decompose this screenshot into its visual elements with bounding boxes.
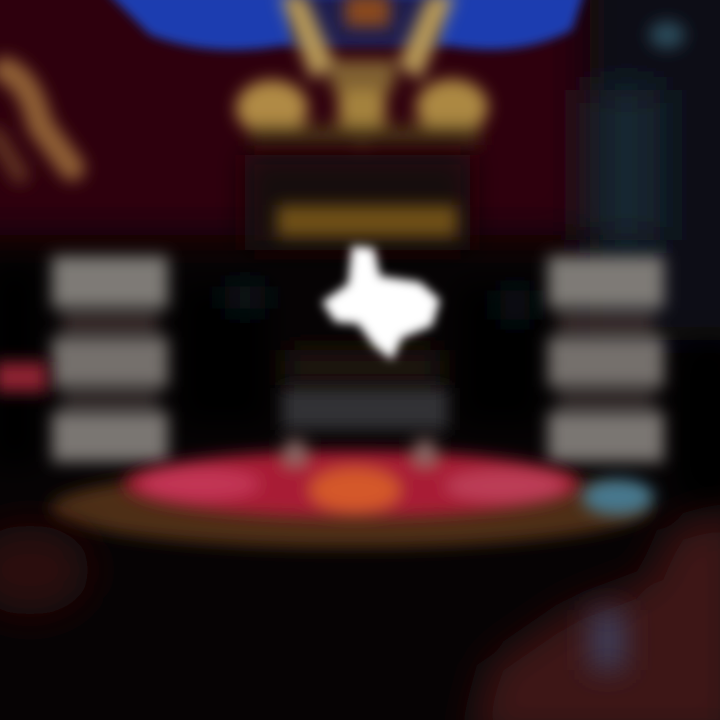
blue accent — [582, 479, 654, 515]
panel: left stats — [52, 256, 168, 462]
icon: gold ornament left — [0, 70, 72, 175]
banner: blue arc — [105, 0, 585, 50]
table surface — [124, 440, 580, 517]
icon: gold emblem — [236, 0, 488, 147]
heading: gold title — [277, 205, 457, 237]
label: center gray box — [282, 388, 448, 430]
center dark panel — [285, 350, 440, 385]
left red accent — [0, 362, 47, 392]
icon: top right light — [649, 21, 685, 49]
foreground figure — [470, 510, 720, 720]
icon: Texas map — [322, 246, 440, 360]
side blue haze — [225, 285, 530, 320]
foreground highlight — [590, 350, 720, 670]
table rim — [50, 468, 650, 548]
dark side columns — [0, 265, 720, 500]
left foreground — [0, 525, 90, 615]
table — [50, 440, 654, 548]
title panel — [245, 155, 470, 250]
panel: right stats — [548, 256, 664, 462]
